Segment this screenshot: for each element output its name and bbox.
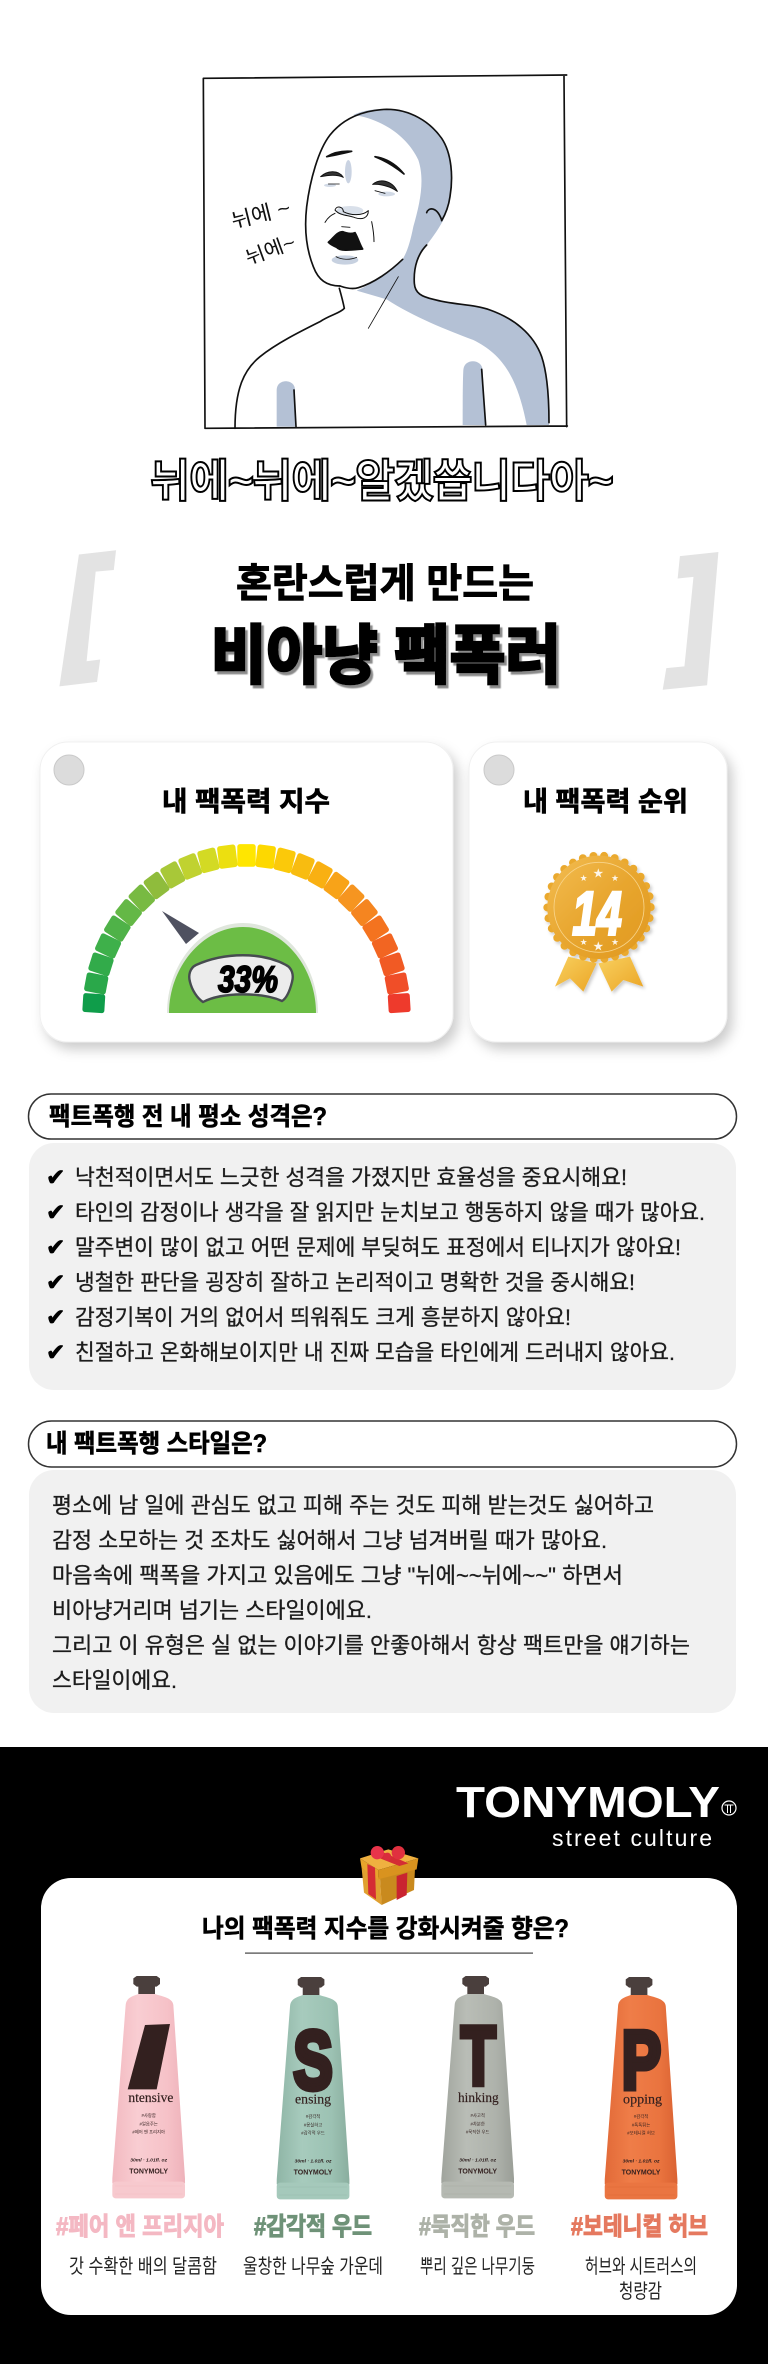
product: grey hand cream tube: hinking [458,2090,499,2105]
gold medal 14: ★ [580,938,588,948]
checklist: ✔ [46,1235,65,1261]
gold medal 14: ★ [611,874,619,884]
checklist: 친절하고 온화해보이지만 내 진짜 모습을 타인에게 드러내지 않아요. [75,1340,675,1365]
checklist: ✔ [46,1165,65,1191]
logo: TONYMOLY street culture: street culture [552,1825,712,1851]
label: heavy wood [419,2213,535,2278]
description text: 비아냥거리며 넘기는 스타일이에요. [52,1598,372,1623]
gauge needle [162,911,199,944]
decorative bracket right [663,552,718,690]
product: grey hand cream tube: TONYMOLY [458,2168,497,2175]
title: subtitle line: 혼란스럽게 만드는 [236,562,534,606]
product: green hand cream tube: S [293,2013,333,2106]
card heading: 내 팩폭력 순위 [523,787,688,817]
label: heavy wood: 뿌리 깊은 나무기둥 [420,2255,535,2278]
product: grey hand cream tube: #사고적 [470,2112,485,2119]
heading: 내 팩트폭행 스타일은? [46,1430,267,1458]
product: green hand cream tube: TONYMOLY [294,2169,333,2176]
logo: TONYMOLY street culture: TONYMOLY [456,1778,720,1827]
product: grey hand cream tube: #차분한 [470,2120,485,2127]
title: main line: 비아냥 팩폭러 [211,620,561,692]
gauge value: 33% [218,959,278,1000]
checklist: ✔ [46,1200,65,1226]
panel: index gauge card [40,742,453,1042]
handwritten mumbling: 뉘에~ [243,231,299,270]
caption: outlined speech line: 뉘에~뉘에~알겠씁니다아~ [151,457,613,506]
panel: fact-bomb style [28,1421,736,1713]
gauge hub [167,923,318,1013]
checklist: 타인의 감정이나 생각을 잘 읽지만 눈치보고 행동하지 않을 때가 많아요. [75,1200,705,1225]
product: green hand cream tube: #몽실하고 [304,2121,322,2128]
label: botanical herb [571,2213,708,2303]
product: green hand cream tube: ensing [295,2092,331,2107]
product: grey hand cream tube [441,1976,514,2198]
product: green hand cream tube: #감각적 우드 [301,2130,325,2137]
description box [29,1470,736,1713]
label: botanical herb: 허브와 시트러스의 [585,2255,697,2278]
description text: 마음속에 팩폭을 가지고 있음에도 그냥 "뉘에~~뉘에~~" 하면서 [52,1563,623,1588]
product: pink hand cream tube: 30ml · 1.01fl. oz [130,2158,168,2164]
product: pink hand cream tube: #얼음주는 [139,2120,158,2127]
description text: 그리고 이 유형은 실 없는 이야기를 안좋아해서 항상 팩트만을 얘기하는 [52,1633,690,1658]
checklist: ✔ [46,1340,65,1366]
checklist box [29,1143,736,1390]
comic panel: bald man illustration [203,75,567,428]
product: pink hand cream tube: #사랑함 [141,2112,156,2119]
description text: 스타일이에요. [52,1668,177,1693]
face [327,151,352,157]
label: sensual wood: #감각적 우드 [254,2213,372,2241]
checklist: 냉철한 판단을 굉장히 잘하고 논리적이고 명확한 것을 중시해요! [75,1270,635,1295]
product: orange hand cream tube: 30ml · 1.01fl. oz [623,2159,660,2165]
product: grey hand cream tube: 30ml · 1.01fl. oz [459,2158,497,2164]
heading: 팩트폭행 전 내 평소 성격은? [49,1103,327,1131]
label: sensual wood [243,2213,383,2278]
head and body outline [306,109,452,286]
checklist: 낙천적이면서도 느긋한 성격을 가졌지만 효율성을 중요시해요! [75,1165,627,1190]
description text: 평소에 남 일에 관심도 없고 피해 주는 것도 피해 받는것도 싫어하고 [52,1493,654,1518]
product: pink hand cream tube: TONYMOLY [129,2168,168,2175]
heading pill [28,1421,736,1467]
logo: TONYMOLY street culture [456,1778,736,1851]
product: green hand cream tube: #감각적 [306,2113,320,2120]
product: pink hand cream tube [112,1976,185,2198]
frame [203,75,567,428]
gold medal 14: 14 [572,879,622,948]
checklist: ✔ [46,1270,65,1296]
panel: usual personality [28,1094,736,1390]
section heading: recommended scent: 나의 팩폭력 지수를 강화시켜줄 향은? [202,1915,569,1943]
product: grey hand cream tube: T [461,2009,496,2102]
gauge scale segments [82,844,411,1013]
shading [277,109,549,427]
product: pink hand cream tube: ntensive [128,2090,173,2105]
label: sensual wood: 울창한 나무숲 가운데 [243,2255,383,2278]
gauge value plate [189,955,293,1002]
pin [54,755,84,785]
description text: 감정 소모하는 것 조차도 싫어해서 그냥 넘겨버릴 때가 많아요. [52,1528,607,1553]
panel: rank medal card [469,742,727,1042]
panel: black product section background [0,1747,768,2364]
checklist: ✔ [46,1305,65,1331]
icon: gift box [360,1846,418,1905]
product: orange hand cream tube: P [622,2013,661,2106]
checklist [46,1165,705,1366]
checklist: 감정기복이 거의 없어서 띄워줘도 크게 흥분하지 않아요! [75,1305,571,1330]
product: orange hand cream tube: #톡톡튀는 [632,2121,650,2128]
checklist: 말주변이 많이 없고 어떤 문제에 부딪혀도 표정에서 티나지가 않아요! [75,1235,681,1260]
label: botanical herb: 청량감 [619,2280,662,2303]
product: orange hand cream tube: opping [623,2092,662,2107]
product: orange hand cream tube: #감각적 [634,2113,648,2120]
gold medal 14 [547,856,651,992]
handwritten mumbling: 뉘에 ~ [229,196,293,233]
label: pear and freesia: 갓 수확한 배의 달콤함 [69,2255,217,2278]
label: pear and freesia: #페어 앤 프리지아 [56,2213,224,2241]
label: pear and freesia [56,2213,224,2278]
product: orange hand cream tube: #보테니컬 허브 [627,2130,655,2137]
label: heavy wood: #묵직한 우드 [419,2213,535,2241]
gold medal 14: ★ [593,938,604,953]
gold medal 14: ★ [593,866,604,881]
product: grey hand cream tube: #묵직한 우드 [466,2129,489,2136]
heading pill [28,1094,736,1139]
product: green hand cream tube: 30ml · 1.01fl. oz [295,2159,332,2165]
product: orange hand cream tube: TONYMOLY [622,2169,661,2176]
description text [52,1493,690,1693]
handwritten mumbling [229,196,299,270]
decorative bracket left [59,550,116,686]
product: pink hand cream tube: #페어 앤 프리지아 [132,2129,165,2136]
card heading: 내 팩폭력 지수 [162,787,330,817]
product: orange hand cream tube [605,1977,677,2199]
gold medal 14: ★ [580,874,588,884]
gold medal 14: ★ [611,938,619,948]
product: green hand cream tube [277,1977,349,2199]
pin [484,755,514,785]
panel: recommended perfume card [41,1878,737,2315]
label: botanical herb: #보테니컬 허브 [571,2213,708,2241]
